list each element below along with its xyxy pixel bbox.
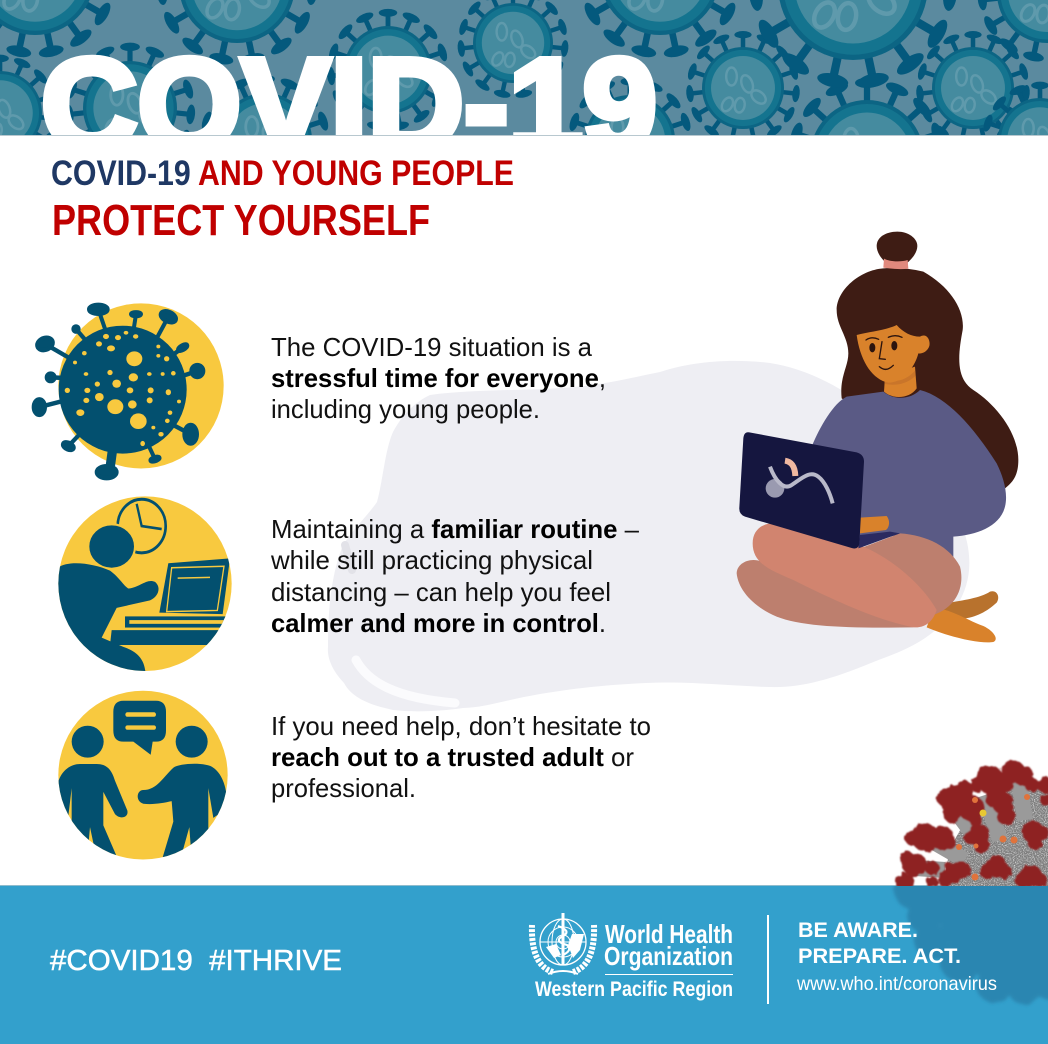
text block: stressful time [271, 334, 606, 424]
hashtags: #COVID19 #ITHRIVE [50, 945, 342, 977]
text block: reach out [271, 713, 651, 803]
WHO name: Western Pacific Region [535, 977, 733, 1001]
clock [118, 499, 166, 553]
feet [927, 591, 998, 642]
WHO emblem [532, 913, 594, 974]
slogan and url [796, 919, 997, 995]
sweater [812, 390, 1006, 557]
hair band [883, 259, 908, 269]
WHO name [535, 919, 733, 1001]
WHO name: World Health [605, 919, 733, 949]
illustration: girl with laptop [737, 232, 1018, 642]
WHO logo [532, 913, 733, 1001]
text block: reach out: reach out to a trusted adult or [271, 744, 634, 772]
legs [737, 523, 961, 628]
slogan and url: PREPARE. ACT. [798, 945, 961, 968]
background blob [328, 361, 969, 711]
text block: familiar routine: while still practicing physical [270, 547, 593, 575]
text block: reach out: professional. [271, 775, 416, 803]
text block: reach out: If you need help, don’t hesitate to [271, 713, 651, 741]
face and neck [857, 325, 930, 397]
speech bubble [113, 701, 166, 755]
slogan and url: www.who.int/coronavirus [796, 973, 997, 995]
virus spikes [34, 305, 203, 478]
text block: familiar routine [270, 516, 640, 638]
text block: familiar routine: calmer and more in control. [271, 610, 606, 638]
banner: virus pattern [0, 0, 1048, 135]
title: COVID-19 [41, 31, 657, 177]
slogan and url: BE AWARE. [798, 919, 918, 942]
heading: covid-19 and young people: COVID-19 AND YOUNG PEOPLE [51, 154, 514, 193]
hand [860, 516, 889, 533]
text block: stressful time: The COVID-19 situation is a [271, 334, 593, 362]
two figures [57, 726, 227, 862]
text block: stressful time: stressful time for everyone, [271, 365, 606, 393]
divider [767, 915, 769, 1004]
icon: two people talking [57, 691, 228, 862]
text block: familiar routine: Maintaining a familiar routine – [271, 516, 640, 544]
person and desk [57, 524, 233, 675]
WHO name: Organization [604, 941, 733, 971]
facial features [866, 336, 902, 369]
laptop [739, 432, 900, 548]
virus dots [65, 331, 181, 446]
icon: virus on yellow circle [34, 303, 224, 478]
text block: stressful time: including young people. [271, 396, 540, 424]
icon: person at laptop with clock [57, 496, 233, 675]
heading: protect yourself: PROTECT YOURSELF [52, 196, 430, 245]
photo: coronavirus [895, 760, 1048, 1005]
footer band [0, 886, 1048, 1044]
hair [837, 232, 1018, 490]
text block: familiar routine: distancing – can help you feel [271, 579, 611, 607]
